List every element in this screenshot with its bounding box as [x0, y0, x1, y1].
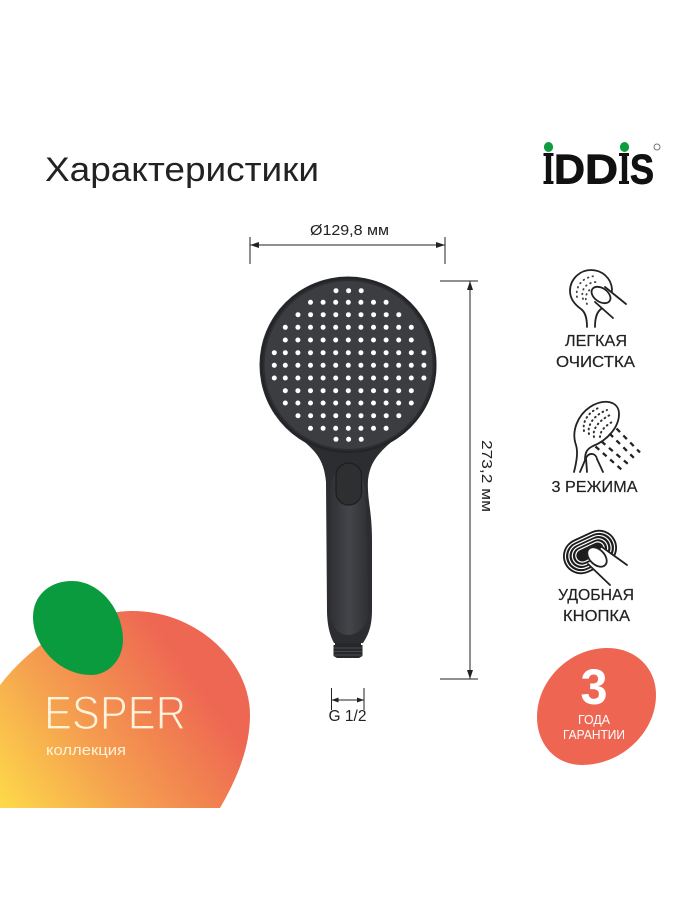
label: easy cleaning: ОЧИСТКА [556, 354, 636, 371]
collection caption: коллекция [46, 742, 126, 759]
shower head product [260, 276, 436, 658]
label: comfortable button [558, 587, 634, 625]
label: comfortable button: КНОПКА [563, 608, 631, 625]
badge: 3-year warranty: 3 [580, 659, 608, 715]
mode button [336, 463, 362, 505]
icon: three spray modes [574, 402, 640, 472]
logo: IDDIS [544, 142, 660, 192]
icon: easy cleaning [570, 270, 626, 327]
label: comfortable button: УДОБНАЯ [558, 587, 634, 604]
dimension: total length: 273,2 мм [478, 440, 495, 512]
label: easy cleaning: ЛЕГКАЯ [565, 333, 627, 350]
dimension: G 1/2 thread [328, 688, 366, 725]
spray nozzles [274, 291, 424, 439]
green accent blob [33, 581, 123, 675]
label: three modes: 3 РЕЖИМА [552, 479, 638, 496]
logo: IDDIS: I [620, 146, 629, 192]
icon: comfortable button [557, 524, 627, 585]
badge: 3-year warranty [537, 648, 656, 765]
connector thread [334, 640, 362, 658]
logo: IDDIS: I [544, 146, 553, 192]
collection blob [0, 581, 250, 808]
dimension: head diameter [250, 222, 445, 264]
badge: 3-year warranty: ГОДА [578, 713, 611, 727]
dimension: head diameter: Ø129,8 мм [310, 222, 389, 239]
handle front panel [330, 468, 368, 635]
title: Характеристики [45, 151, 319, 189]
logo: IDDIS: D [585, 146, 618, 192]
handle body [300, 438, 396, 643]
label: easy cleaning [556, 333, 636, 371]
logo: IDDIS: S [630, 146, 654, 192]
head body [260, 276, 436, 454]
dimension: total length [440, 281, 495, 679]
dimension: G 1/2 thread: G 1/2 [328, 708, 366, 725]
badge: 3-year warranty: ГАРАНТИИ [563, 728, 625, 742]
collection name: ESPER [44, 686, 186, 739]
logo: IDDIS: D [554, 146, 585, 192]
head face plate [264, 281, 432, 449]
